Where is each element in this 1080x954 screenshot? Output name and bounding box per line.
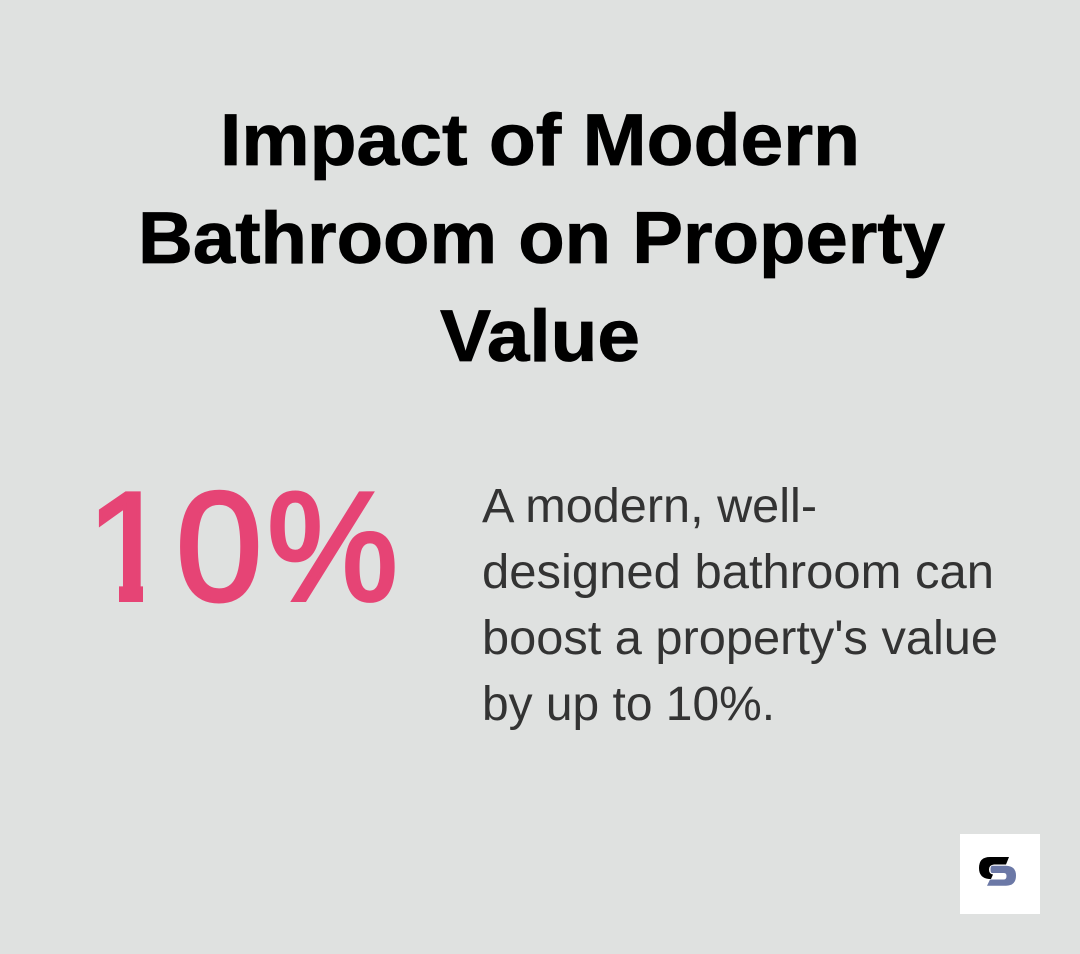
big statistic: 10%: 0: [176, 460, 262, 633]
logo badge: [960, 834, 1040, 914]
description text: A modern, well-: [482, 480, 817, 533]
title: Bathroom on Property: [138, 198, 945, 279]
description text: by up to 10%.: [482, 678, 775, 731]
big statistic: 10%: %: [267, 460, 398, 633]
big statistic: 10%: 1: [86, 460, 172, 633]
title: Value: [440, 296, 640, 377]
big statistic: 10%: [98, 490, 395, 604]
title: [138, 100, 945, 377]
description text: [482, 480, 998, 731]
description text: boost a property's value: [482, 612, 998, 665]
description text: designed bathroom can: [482, 546, 994, 599]
title: Impact of Modern: [220, 100, 860, 181]
